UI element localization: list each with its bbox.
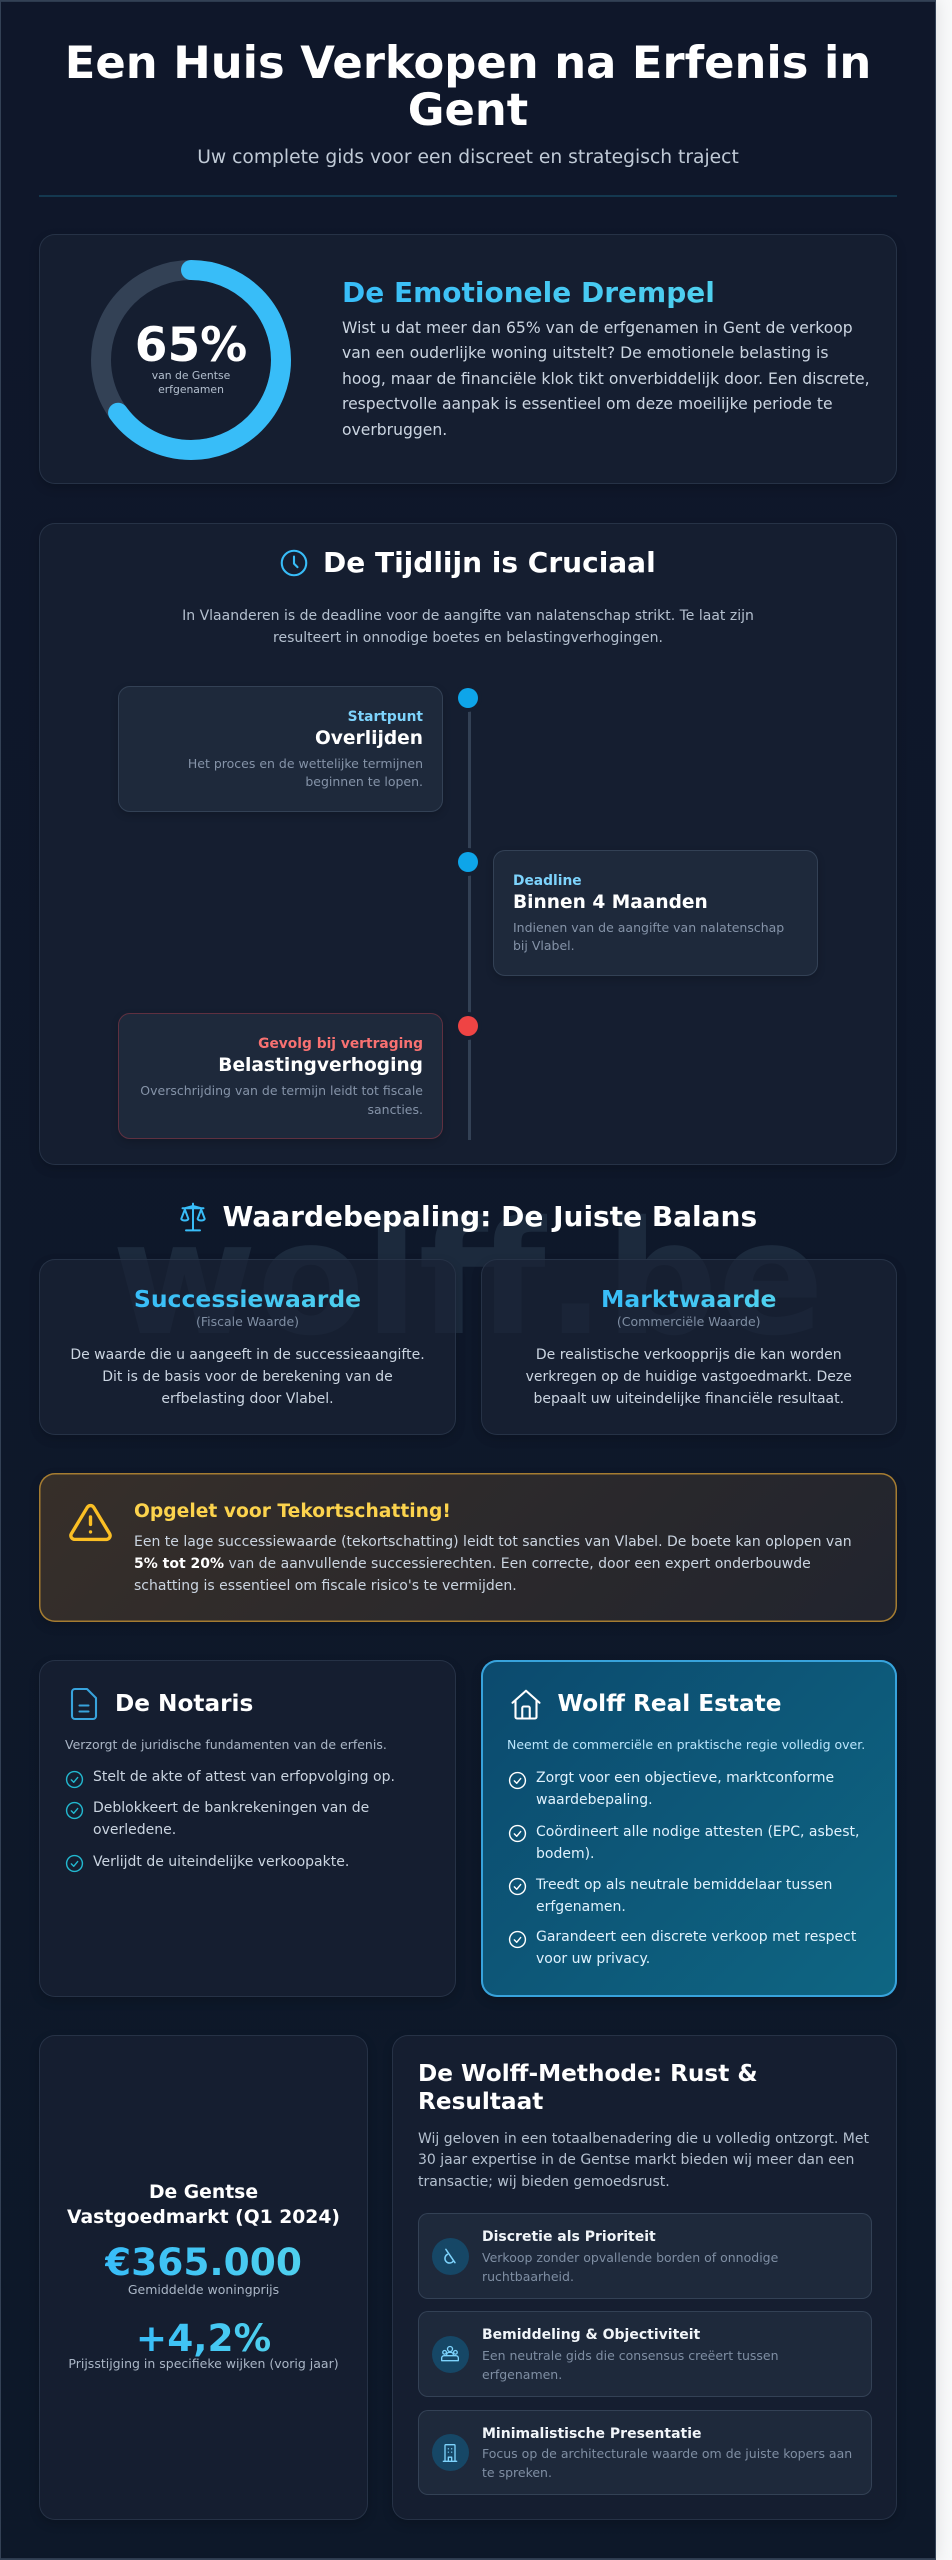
method card: bemiddeling (418, 2311, 872, 2396)
heading: De Notaris (115, 1690, 253, 1717)
subheading: (Commerciële Waarde) (617, 1314, 761, 1329)
timeline card: overlijden: Startpunt (348, 708, 423, 724)
timeline dot 1 (458, 688, 478, 708)
intro text: In Vlaanderen is de deadline voor de aangifte van nalatenschap strikt. Te laat zijn (182, 608, 754, 624)
heading (67, 2182, 340, 2228)
text: Een te lage successiewaarde (tekortschatting) leidt tot sancties van Vlabel. De boete kan oplopen van (134, 1534, 852, 1550)
list item 1: Zorgt voor een objectieve, marktconforme (536, 1770, 834, 1786)
icon: discretion (432, 2238, 468, 2274)
timeline dot 2 (458, 852, 478, 872)
icon: scales (180, 1202, 206, 1232)
heading: Vastgoedmarkt (Q1 2024) (67, 2207, 340, 2228)
list item 2: overledene. (93, 1822, 176, 1838)
method card: minimalistisch (418, 2410, 872, 2495)
list item 3 (536, 1877, 832, 1915)
panel: de gentse vastgoedmarkt (39, 2034, 368, 2520)
card text: te spreken. (482, 2465, 552, 2480)
text (134, 1534, 852, 1594)
panel: de notaris (39, 1660, 456, 1997)
heading: Wolff Real Estate (558, 1690, 781, 1717)
paragraph: van een ouderlijke woning uitstelt? De emotionele belasting is (342, 344, 828, 362)
card text (482, 2250, 778, 2284)
card title: Minimalistische Presentatie (482, 2426, 702, 2442)
text (526, 1347, 852, 1407)
icon: check 4 (508, 1930, 526, 1948)
stat label: Prijsstijging in specifieke wijken (vorig jaar) (68, 2356, 339, 2371)
callout: opgelet voor tekortschatting (39, 1473, 897, 1622)
list item 4: voor uw privacy. (536, 1951, 650, 1967)
list item 3: Verlijdt de uiteindelijke verkoopakte. (93, 1854, 349, 1870)
paragraph (418, 2130, 869, 2190)
intro text: resulteert in onnodige boetes en belastingverhogingen. (273, 630, 663, 646)
method card: discretie (418, 2213, 872, 2298)
card text (482, 2348, 779, 2382)
panel: marktwaarde (480, 1259, 897, 1435)
icon: check 3 (508, 1878, 526, 1896)
card text: ruchtbaarheid. (482, 2268, 574, 2284)
paragraph (342, 318, 870, 439)
heading: Opgelet voor Tekortschatting! (134, 1501, 451, 1522)
section heading: waardebepaling (180, 1200, 757, 1233)
heading: Waardebepaling: De Juiste Balans (222, 1200, 757, 1233)
icon: check 2 (66, 1802, 84, 1820)
panel: de tijdlijn is cruciaal (39, 523, 897, 1165)
panel: de wolff-methode (392, 2034, 897, 2520)
text: schatting is essentieel om fiscale risico's te vermijden. (134, 1578, 517, 1594)
timeline card: belastingverhoging: Gevolg bij vertraging (258, 1036, 423, 1052)
donut value: 65% (135, 318, 247, 373)
timeline dot 3 (458, 1016, 478, 1036)
timeline card: binnen 4 maanden: bij Vlabel. (513, 938, 575, 953)
heading: De Tijdlijn is Cruciaal (323, 546, 656, 579)
paragraph: overbruggen. (342, 421, 447, 439)
heading: Marktwaarde (601, 1285, 776, 1313)
title: Een Huis Verkopen na Erfenis in (65, 36, 871, 89)
heading: De Emotionele Drempel (342, 276, 715, 309)
timeline card: overlijden: beginnen te lopen. (305, 774, 423, 789)
timeline card: belastingverhoging: Overschrijding van de termijn leidt tot fiscale (140, 1083, 423, 1098)
card text: Focus op de architecturale waarde om de juiste kopers aan (482, 2446, 852, 2461)
intro: Verzorgt de juridische fundamenten van de erfenis. (65, 1737, 387, 1752)
card text (482, 2446, 852, 2480)
paragraph: hoog, maar de financiële klok tikt onverbiddelijk door. Een discrete, (342, 370, 870, 388)
card title: Discretie als Prioriteit (482, 2229, 656, 2245)
timeline card: binnen 4 maanden: Deadline (513, 872, 582, 888)
text: erfbelasting door Vlabel. (161, 1391, 334, 1407)
heading (418, 2060, 758, 2115)
icon: document (70, 1688, 98, 1720)
timeline card: binnen 4 maanden (493, 850, 818, 976)
text: Dit is de basis voor de berekening van de (102, 1369, 393, 1385)
paragraph: Wij geloven in een totaalbenadering die u volledig ontzorgt. Met (418, 2130, 869, 2146)
timeline card: belastingverhoging (118, 1013, 443, 1139)
icon: check 3 (66, 1854, 84, 1872)
subheading: (Fiscale Waarde) (196, 1314, 299, 1329)
timeline card: belastingverhoging: sancties. (367, 1102, 423, 1117)
title: Gent (408, 83, 528, 136)
icon: check 1 (508, 1772, 526, 1790)
subtitle: Uw complete gids voor een discreet en strategisch traject (197, 147, 739, 168)
timeline axis (468, 685, 471, 1140)
stat: price increase: +4,2% (136, 2316, 271, 2360)
panel: de emotionele drempel (39, 234, 897, 484)
title (65, 36, 871, 136)
panel: successiewaarde (39, 1259, 456, 1435)
stat: average price: €365.000 (105, 2240, 302, 2284)
icon: warning (69, 1504, 112, 1542)
timeline card: overlijden (118, 686, 443, 812)
text: De realistische verkoopprijs die kan worden (536, 1347, 842, 1363)
card text: Verkoop zonder opvallende borden of onnodige (482, 2250, 778, 2264)
list item 3: erfgenamen. (536, 1899, 626, 1915)
paragraph: respectvolle aanpak is essentieel om deze moeilijke periode te (342, 395, 833, 413)
intro: Neemt de commerciële en praktische regie volledig over. (507, 1737, 865, 1752)
list item 2: Coördineert alle nodige attesten (EPC, asbest, (536, 1824, 860, 1840)
watermark: wolff.be: wolff.be (112, 1188, 824, 1370)
list item 3: Treedt op als neutrale bemiddelaar tussen (536, 1877, 832, 1893)
text: bepaalt uw uiteindelijke financiële resultaat. (533, 1391, 844, 1407)
list item 1 (536, 1770, 834, 1808)
timeline card: binnen 4 maanden: Indienen van de aangifte van nalatenschap (513, 920, 784, 934)
icon: check 1 (66, 1770, 84, 1788)
timeline card: overlijden: Het proces en de wettelijke termijnen (188, 756, 423, 770)
list item 1: waardebepaling. (536, 1792, 653, 1808)
donut caption (152, 369, 230, 396)
icon: check 2 (508, 1824, 526, 1842)
intro text (182, 608, 754, 646)
list item 4: Garandeert een discrete verkoop met respect (536, 1929, 856, 1945)
text: De waarde die u aangeeft in de successieaangifte. (70, 1347, 425, 1363)
list item 2: bodem). (536, 1846, 595, 1862)
paragraph: transactie; wij bieden gemoedsrust. (418, 2174, 670, 2190)
timeline card: binnen 4 maanden: Binnen 4 Maanden (513, 892, 708, 912)
paragraph: 30 jaar expertise in de Gentse markt bieden wij meer dan een (418, 2152, 854, 2168)
list item 1: Stelt de akte of attest van erfopvolging op. (93, 1769, 395, 1785)
paragraph: Wist u dat meer dan 65% van de erfgenamen in Gent de verkoop (342, 318, 853, 336)
heading: Successiewaarde (134, 1285, 361, 1313)
list item 2: Deblokkeert de bankrekeningen van de (93, 1800, 369, 1816)
list item 4 (536, 1929, 856, 1967)
heading: De Gentse (149, 2182, 258, 2203)
donut chart: 65% (91, 260, 291, 460)
text: 5% tot 20% van de aanvullende successierechten. Een correcte, door een expert onderbouwde (134, 1556, 811, 1572)
header (65, 36, 871, 168)
text: verkregen op de huidige vastgoedmarkt. Deze (526, 1369, 852, 1385)
card title: Bemiddeling & Objectiviteit (482, 2327, 700, 2343)
donut caption: erfgenamen (158, 382, 224, 396)
donut caption: van de Gentse (152, 369, 230, 382)
icon: people (432, 2336, 468, 2372)
timeline card: overlijden: Overlijden (315, 728, 423, 748)
icon: clock (280, 550, 308, 576)
stat label: Gemiddelde woningprijs (128, 2282, 279, 2296)
timeline card: belastingverhoging: Belastingverhoging (218, 1055, 423, 1076)
panel: wolff real estate (480, 1660, 897, 1997)
list item 2 (93, 1800, 369, 1838)
card text: erfgenamen. (482, 2366, 562, 2382)
heading: De Wolff-Methode: Rust & (418, 2060, 758, 2086)
card text: Een neutrale gids die consensus creëert tussen (482, 2348, 779, 2362)
text (70, 1347, 425, 1407)
icon: building (432, 2434, 468, 2471)
icon: house (511, 1690, 541, 1720)
heading: Resultaat (418, 2088, 543, 2115)
list item 2 (536, 1824, 860, 1862)
